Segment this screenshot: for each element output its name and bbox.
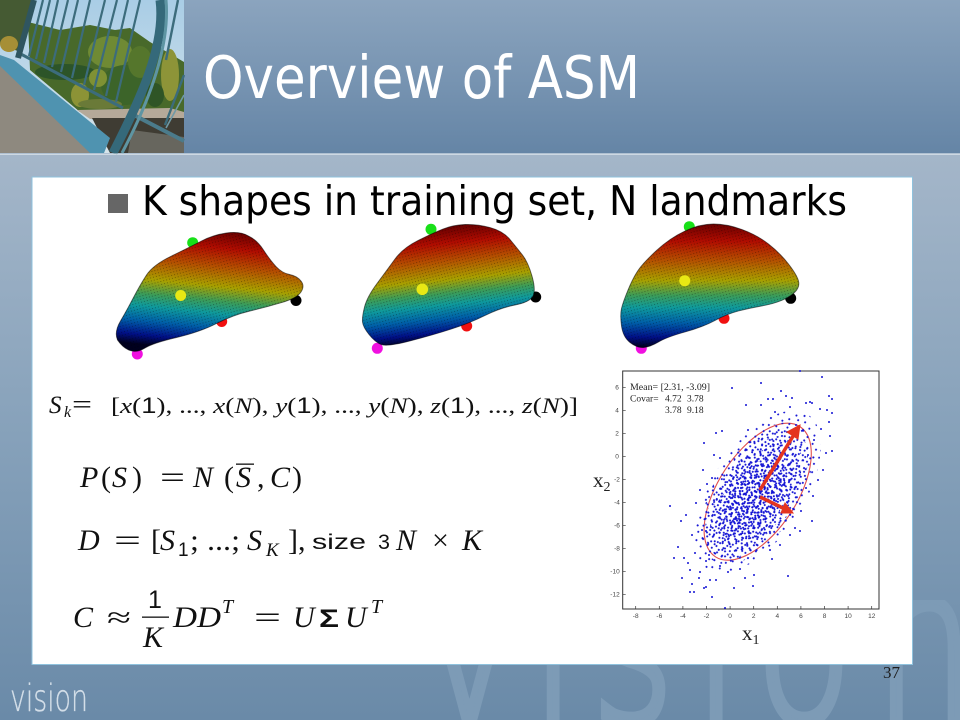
axis ticks and labels: -8 <box>614 546 620 552</box>
plot annotation: mean and covariance: Covar= <box>630 394 659 404</box>
formula: shape vector S_k: = <box>72 390 92 419</box>
formula: data matrix D: [ <box>151 524 161 557</box>
formula: data matrix D: = <box>114 524 141 557</box>
footer logo: vision: vision <box>10 677 88 720</box>
formula: P(S) Gaussian: S <box>236 461 251 494</box>
axis ticks and labels: -4 <box>680 613 686 620</box>
formula: covariance C: T <box>222 596 235 618</box>
liver shape 3 with landmarks <box>621 221 799 354</box>
plot annotation: mean and covariance <box>630 383 710 416</box>
formula: data matrix D: size <box>312 530 366 554</box>
formula: P(S) Gaussian: ) <box>132 461 142 494</box>
axis ticks and labels: -12 <box>610 592 620 598</box>
formula: data matrix D: K <box>461 524 484 557</box>
formula: P(S) Gaussian: , <box>257 461 264 494</box>
formula: covariance C: K <box>142 621 165 654</box>
page number: 37 <box>883 663 900 682</box>
x axis label: x <box>742 621 752 645</box>
formula: P(S) Gaussian <box>79 461 302 494</box>
axis ticks and labels: -8 <box>633 613 639 620</box>
principal axis arrows <box>760 425 800 513</box>
axis ticks and labels: 10 <box>844 613 852 620</box>
axis ticks and labels: 12 <box>868 613 876 620</box>
plot annotation: mean and covariance: 4.72 <box>665 394 682 404</box>
axis ticks and labels: 6 <box>615 384 619 392</box>
formula: data matrix D <box>77 524 484 561</box>
x axis label: 1 <box>752 633 760 648</box>
formula: covariance C: U <box>345 601 369 634</box>
plot annotation: mean and covariance: Mean= [2.31, -3.09] <box>630 383 710 393</box>
axis ticks and labels: -10 <box>610 568 620 576</box>
formula: P(S) Gaussian: N <box>192 461 215 494</box>
slide background <box>0 154 960 720</box>
formula: data matrix D: ], <box>288 524 306 557</box>
liver shape 1 with landmarks <box>116 232 303 360</box>
formula: P(S) Gaussian: S <box>112 461 127 494</box>
formula: covariance C: DD <box>172 601 221 634</box>
formula: P(S) Gaussian: ( <box>101 461 111 494</box>
formula: covariance C: = <box>254 601 281 634</box>
formula: covariance C: ≈ <box>107 602 131 634</box>
formula: data matrix D: S <box>247 524 262 557</box>
formula: data matrix D: N <box>395 524 418 557</box>
formula: covariance C: C <box>73 601 94 634</box>
formula: data matrix D: 1 <box>178 540 189 561</box>
axis ticks and labels: -2 <box>614 476 620 484</box>
formula: data matrix D: D <box>77 524 100 557</box>
plot annotation: mean and covariance: 3.78 <box>687 394 704 404</box>
axis ticks and labels: 0 <box>728 613 732 620</box>
covariance ellipse <box>682 405 833 578</box>
axis ticks and labels: -4 <box>614 500 620 506</box>
formula: data matrix D: 3 <box>378 530 390 554</box>
scatter plot with covariance ellipse <box>593 371 879 648</box>
formula: P(S) Gaussian: = <box>160 461 185 494</box>
formula: covariance C <box>73 586 384 654</box>
axis ticks and labels: 4 <box>775 613 779 620</box>
header photo: bridge railing <box>0 0 184 153</box>
plot annotation: mean and covariance: 9.18 <box>687 406 704 416</box>
axis ticks and labels: 8 <box>823 613 827 620</box>
formula: covariance C: T <box>371 596 384 618</box>
formula: data matrix D: ; ...; <box>190 524 240 557</box>
formula: P(S) Gaussian: C <box>270 461 291 494</box>
formula: P(S) Gaussian: P <box>79 461 98 494</box>
formula: data matrix D: × <box>432 524 449 557</box>
formula: data matrix D: S <box>160 524 175 557</box>
axis ticks and labels: 6 <box>799 613 803 620</box>
formula: P(S) Gaussian: ) <box>292 461 302 494</box>
y axis label: 2 <box>604 480 610 495</box>
plot frame <box>623 371 879 609</box>
header band <box>184 0 960 153</box>
header rule <box>0 154 960 155</box>
liver shape 2 with landmarks <box>362 224 541 354</box>
axis ticks and labels: 0 <box>615 454 619 460</box>
scatter points <box>669 371 846 608</box>
formula: shape vector S_k: k <box>64 404 72 421</box>
axis ticks and labels: -6 <box>656 613 663 620</box>
y axis label: x <box>593 468 604 492</box>
formula: shape vector S_k: S <box>49 392 62 419</box>
formula: covariance C: 1 <box>148 586 162 614</box>
formula: P(S) Gaussian: ( <box>224 461 234 494</box>
watermark: vision <box>423 600 960 720</box>
formula: covariance C: U <box>293 601 317 634</box>
formula: covariance C: Σ <box>319 605 339 633</box>
white content panel <box>32 177 912 664</box>
bullet heading: K shapes in training set, N landmarks <box>142 177 847 225</box>
plot annotation: mean and covariance: 3.78 <box>665 406 682 416</box>
axis ticks and labels: -6 <box>614 522 620 530</box>
axis ticks and labels: 2 <box>615 430 619 438</box>
formula: data matrix D: K <box>265 540 280 561</box>
axis ticks and labels: 4 <box>615 408 619 414</box>
axis ticks and labels: 2 <box>752 613 756 620</box>
title: Overview of ASM <box>203 43 640 112</box>
axis ticks and labels: -2 <box>704 613 710 620</box>
axis ticks and labels <box>610 384 876 620</box>
formula: shape vector S_k: [x(1), ..., x(N), y(1), ..., y(N), z(1), ..., z(N)] <box>111 393 578 418</box>
